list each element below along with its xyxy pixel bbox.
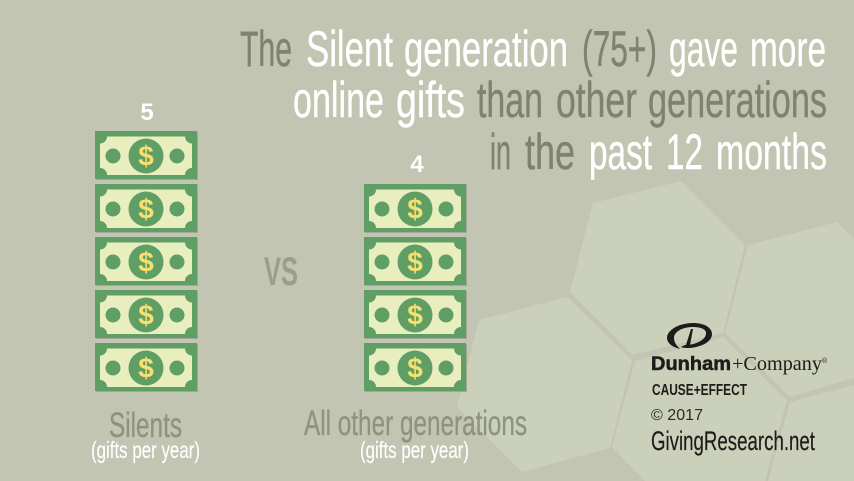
bill 3: $: [138, 246, 154, 278]
bill 3: $: [407, 300, 423, 330]
bill 2: $: [407, 246, 423, 278]
value: silents 5: 5: [140, 99, 154, 126]
brand block: +Company: [732, 353, 822, 375]
bill 1: $: [407, 194, 423, 224]
bill 1: $: [138, 140, 154, 172]
bill 3: [95, 237, 198, 286]
bill 5: $: [138, 352, 154, 384]
title: [240, 21, 827, 180]
bill stack: all other generations: [364, 184, 467, 392]
bill 1: [95, 131, 198, 180]
bill 4: [364, 343, 467, 392]
icon: dunham logo: [667, 323, 712, 349]
label: all other generations: All other generations: [304, 404, 527, 443]
bill 2: [95, 184, 198, 233]
bill 4: [95, 290, 198, 339]
label: all other generations: (gifts per year): [360, 437, 469, 463]
title: past: [589, 124, 652, 180]
label: silents: [91, 406, 200, 463]
bill 5: [95, 343, 198, 392]
copyright: © 2017: [651, 407, 703, 424]
title: than: [477, 72, 543, 128]
cause+effect: CAUSE+EFFECT: [652, 382, 747, 399]
bill 3: [364, 290, 467, 339]
bill 1: [364, 184, 467, 233]
bill 4: $: [138, 300, 154, 330]
value: others 4: 4: [410, 151, 424, 178]
title: gave: [669, 21, 738, 77]
label: silents: Silents: [109, 406, 182, 445]
title: other: [556, 72, 637, 128]
title: Silent: [306, 21, 393, 77]
title: The: [240, 21, 292, 77]
bill 2: $: [138, 194, 154, 224]
title: in: [490, 124, 511, 180]
title: generation: [404, 21, 568, 77]
brand block: [651, 323, 828, 456]
bill stack: silents: [95, 131, 198, 392]
company name: Dunham: [651, 354, 731, 375]
honeycomb hexagons: [457, 181, 854, 481]
title: (75+): [582, 21, 657, 77]
title: online: [293, 72, 384, 128]
vs label: VS: [264, 250, 298, 294]
label: all other generations: [304, 404, 527, 463]
title: gifts: [396, 72, 465, 128]
title: 12: [666, 124, 703, 180]
bill 2: [364, 237, 467, 286]
label: silents: (gifts per year): [91, 437, 200, 463]
brand block: ®: [822, 357, 828, 365]
bill 4: $: [407, 352, 423, 384]
title: the: [525, 124, 575, 180]
